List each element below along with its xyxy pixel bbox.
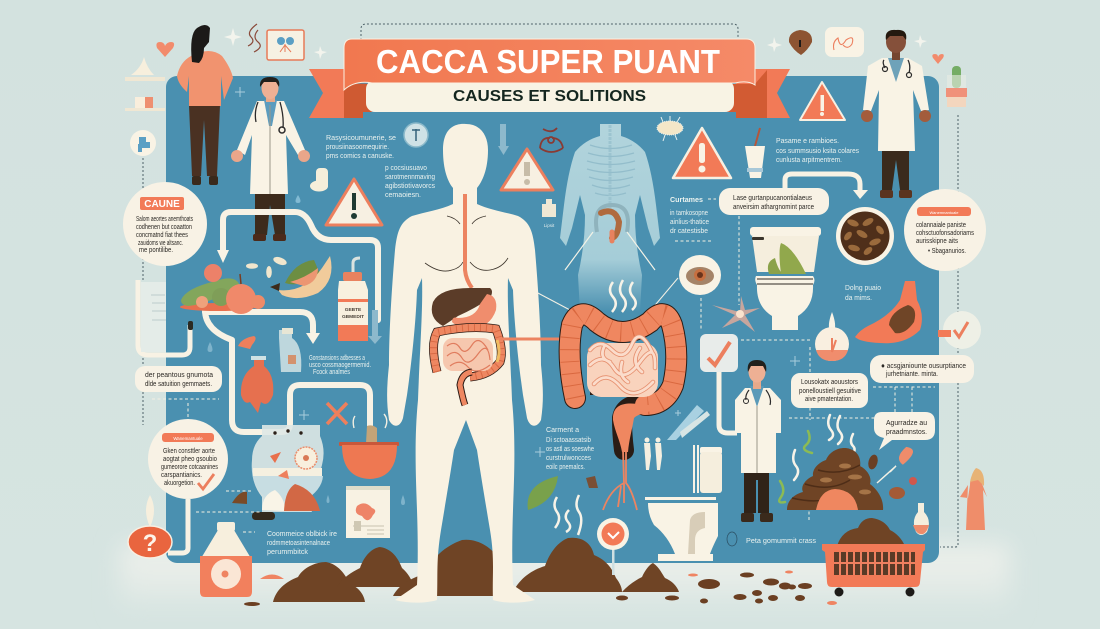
callout: right circle: • Sbaganurios. [928, 246, 966, 255]
notebook [346, 486, 390, 538]
callout pill: Lose [719, 188, 829, 215]
callout: circle 2: Wanemantuale [173, 436, 203, 441]
callout pill: Lousokatx [791, 373, 868, 408]
doctor: lower [735, 360, 781, 522]
pill capsules [310, 168, 328, 192]
text: Pern pomnumit crass: Peta gomummit crass [746, 536, 816, 545]
pill: der penatous: dlde satuition gemmaets. [145, 379, 212, 388]
leaf [528, 476, 558, 510]
text block: Pasame [776, 136, 859, 164]
dashes beside Curtames [675, 199, 716, 241]
callout pill: Lose: anveirsim athargnomint parce [733, 202, 814, 211]
rectal fan [603, 450, 637, 510]
icon: cactus planter [946, 66, 967, 107]
callout pill: acsgjaniounte [870, 355, 974, 383]
question bubble: ? [143, 530, 157, 557]
icon: warning triangle solid [673, 128, 731, 178]
line to question bubble [168, 499, 188, 553]
callout bubble: Agurradze: Agurradze au [886, 418, 927, 427]
small icons right of heap [867, 445, 929, 535]
steam: lower [554, 495, 581, 535]
arrow: pale blue [368, 310, 382, 344]
question bubble [128, 526, 172, 558]
panel: blue background [166, 76, 939, 563]
ribbon left tail [309, 69, 363, 118]
text block: Carment: Carment a [546, 425, 580, 434]
dashed connector: right side [940, 115, 958, 547]
dashed line below pill [701, 216, 739, 330]
callout: circle 2: Gken consttler aorte [163, 446, 215, 455]
icon: squiggle [248, 24, 260, 52]
doctor: upper left [231, 77, 310, 241]
text block: Coommeice: rodmmetoasintenalnace [267, 538, 330, 547]
stomach [452, 294, 496, 329]
small intestine [443, 338, 493, 371]
text block: Carment: os astl as soeswhe [546, 444, 594, 453]
check badge [597, 518, 629, 575]
ribbon right tail [736, 69, 790, 118]
text block: Carment: Di sctoaassatsib [546, 435, 591, 444]
callout bubble: Agurradze: praadmnstos. [886, 427, 927, 436]
callout pill: Lousokatx: aive pmatentation. [805, 394, 853, 403]
title: CACCA SUPER PUANT [376, 43, 720, 80]
dashed grid right [741, 340, 935, 520]
callout: CAUNE: Salom aeortes anemthoats [136, 214, 193, 223]
flow arrows: left [205, 212, 378, 432]
poop heaps on floor [273, 538, 679, 602]
callout: CAUNE: me pontilibe. [139, 245, 173, 254]
organ icons lower left [238, 328, 301, 413]
pill: der penatous: der peantous gnumota [145, 370, 214, 379]
callout: CAUNE: CAUNE [144, 199, 180, 210]
callout: right circle: aurisskipne aits [916, 236, 958, 245]
steam: heap [779, 415, 855, 502]
callout: circle 2: akuorgetion. [164, 478, 195, 487]
icon: check circle right [938, 311, 981, 349]
text block: upper left: Rasysicoumunerie, se [326, 133, 396, 142]
block icon [586, 476, 598, 488]
icon: warning triangle outlined [326, 179, 382, 225]
text block: Carment: curstrulwoncces [546, 453, 591, 462]
text block: Gonstansions: Gonstansions adbesses a [309, 353, 365, 362]
ribbon folds [344, 84, 372, 118]
callout: right circle: colannaiale paniste [916, 220, 966, 229]
dashed connector: left side [142, 158, 144, 425]
icon: biohazard [540, 128, 563, 152]
toilet lower [645, 445, 722, 561]
text block: upper left: pms comics a canuske. [326, 151, 394, 160]
callout: circle 2: gumeorore cotcaanines [161, 462, 218, 471]
icon: block on shelf [125, 97, 165, 111]
text block: Pasame: Pasame e rambioes. [776, 136, 839, 145]
text block: Coommeice: perummbitck [267, 547, 308, 556]
left cream box [138, 280, 193, 355]
text block: Gonstansions: usco cossmaogermernid. [309, 360, 371, 369]
text block: Coommeice: Coommeice oblbick ire [267, 529, 337, 538]
text block: upper middle: sarotmennmaving [385, 172, 435, 181]
beans on floor [244, 572, 812, 606]
dashes left [152, 399, 219, 417]
text block: Pasame: cunlusta arpitmentrem. [776, 155, 842, 164]
poop heap large [787, 448, 883, 510]
callout: circle 2 [148, 419, 228, 499]
text block: Carment [546, 425, 594, 471]
callout: CAUNE: codhenen but coaatton [136, 222, 192, 231]
ribbon main [344, 39, 755, 90]
text block: Curtames: ainlius-thatice [670, 217, 709, 226]
callout pill: acsgjaniounte: jurhetniante. minta. [885, 369, 938, 378]
callout: CAUNE: concmatnd fiat thees [136, 230, 188, 239]
human body main [387, 124, 543, 603]
callout: circle 2: carspantianics. [161, 470, 202, 479]
orange flecks on floor [260, 570, 837, 605]
text block: Gonstansions [309, 353, 371, 376]
icon: heart [156, 42, 174, 57]
dashed connector: title frame [361, 24, 738, 40]
woman figure [177, 25, 233, 185]
bottle: medicine: GEBTE [345, 307, 362, 313]
callout: CAUNE: zauidoms we altsanc. [138, 238, 183, 247]
toilet upper [750, 227, 821, 330]
ghost x-ray body [560, 124, 660, 312]
icon: brown drop [789, 30, 812, 55]
pale stars on panel [235, 87, 800, 457]
cream drop [146, 495, 154, 527]
text block: Carment: eoilc pnemalcs. [546, 462, 585, 471]
esophagus [465, 194, 472, 288]
check card [700, 334, 738, 433]
text block: Pasame: cos summsusio ksita colares [776, 146, 859, 155]
rectal tube [613, 404, 656, 452]
basket [822, 518, 925, 596]
icon: round arrow badge [404, 123, 428, 147]
icon: sparkle [712, 296, 760, 332]
stomach diagram [855, 281, 922, 343]
dashes lower left [196, 491, 260, 532]
connector lines to big intestine [500, 278, 678, 339]
text block: Gonstansions: Fcock analmes [313, 367, 350, 376]
text block: Curtames: Curtames [670, 195, 703, 204]
small figures [644, 438, 662, 470]
text: Pern pomnumit crass [727, 532, 816, 546]
text block: upper middle: cemaoiesn. [385, 190, 421, 199]
subtitle: CAUSES ET SOLITIONS [453, 88, 646, 105]
pouring bowl [339, 414, 399, 479]
text block: upper left: prousiinasoomequirie. [326, 142, 389, 151]
icon: framed anatomy card [267, 30, 304, 60]
icon: heart right [932, 54, 944, 64]
text block: upper left [326, 133, 396, 160]
food: banana and leaf [270, 256, 332, 298]
text block: upper middle [385, 163, 435, 199]
icon: arrow down pale [498, 124, 509, 155]
subtitle strip [366, 80, 734, 112]
icon: water drop [296, 195, 300, 203]
text block: upper middle: p cocsiusuavo [385, 163, 427, 172]
callout: right circle [904, 189, 986, 271]
callout pill: Lousokatx: Lousokatx aouustors [801, 377, 858, 386]
doctor: upper right [861, 30, 931, 198]
callout pill: Lousokatx: ponelloustiell gesuitive [799, 386, 861, 395]
icon: drink cup [745, 128, 765, 178]
icon: small thumb label [542, 199, 556, 228]
icon: flask circle [815, 312, 849, 361]
drops [208, 342, 405, 505]
text: Doing puaio: Dolng puaio [845, 283, 881, 292]
food: vegetables and fruit on tray [180, 264, 265, 314]
icon: warning triangle small [800, 82, 845, 120]
ruler icon [667, 405, 710, 440]
liver [432, 288, 492, 326]
bottle: medicine [338, 258, 368, 341]
pill: der penatous [135, 366, 222, 392]
callout bubble: Agurradze [874, 412, 935, 450]
bottle: medicine: GBMEDIT [342, 314, 364, 320]
callout: right circle: Wanemnantuale [930, 210, 959, 215]
small brown stones [232, 492, 275, 520]
text: Doing puaio: da mims. [845, 293, 872, 302]
colon small [434, 328, 501, 377]
callout: circle 2: aogtat pheo gsoubio [163, 454, 217, 463]
icon: warning triangle centre [501, 149, 553, 190]
floor [120, 545, 1010, 610]
large intestine [570, 314, 676, 510]
ribbon title banner [309, 39, 790, 118]
icon: small thumb label: Lipsit [544, 223, 555, 228]
icon: cream bell on shelf [125, 57, 165, 81]
text block: upper middle: agibstiotivavorcs [385, 181, 435, 190]
steam: centre [610, 280, 636, 312]
callout pill: Lose: Lase gurtanpucanontialaeus [733, 193, 812, 202]
callout pill: acsgjaniounte: ● acsgjaniounte ousurptiance [881, 361, 966, 370]
icon: bacteria [657, 116, 683, 141]
icon: eye [679, 255, 721, 295]
icon: medical circle [130, 130, 156, 156]
rectum [460, 372, 472, 405]
small woman figure right [960, 468, 987, 530]
text: Doing puaio [845, 283, 881, 302]
pills [246, 255, 288, 278]
text block: Curtames: in tamkosopne [670, 208, 708, 217]
callout: right circle: cohsctuofonsadoriams [916, 228, 974, 237]
text block: Curtames: dr catestisbe [670, 226, 708, 235]
bowl of beans [836, 207, 894, 265]
text block: Coommeice [267, 529, 337, 556]
icon: note card [825, 27, 864, 57]
sparkles [224, 28, 927, 59]
jar of digestive items [252, 425, 324, 512]
icon: cross mark [327, 403, 347, 424]
bottle lower [200, 522, 252, 597]
callout: CAUNE [123, 182, 207, 266]
text block: Curtames [670, 195, 709, 235]
flow arrow: upper right [785, 174, 868, 199]
